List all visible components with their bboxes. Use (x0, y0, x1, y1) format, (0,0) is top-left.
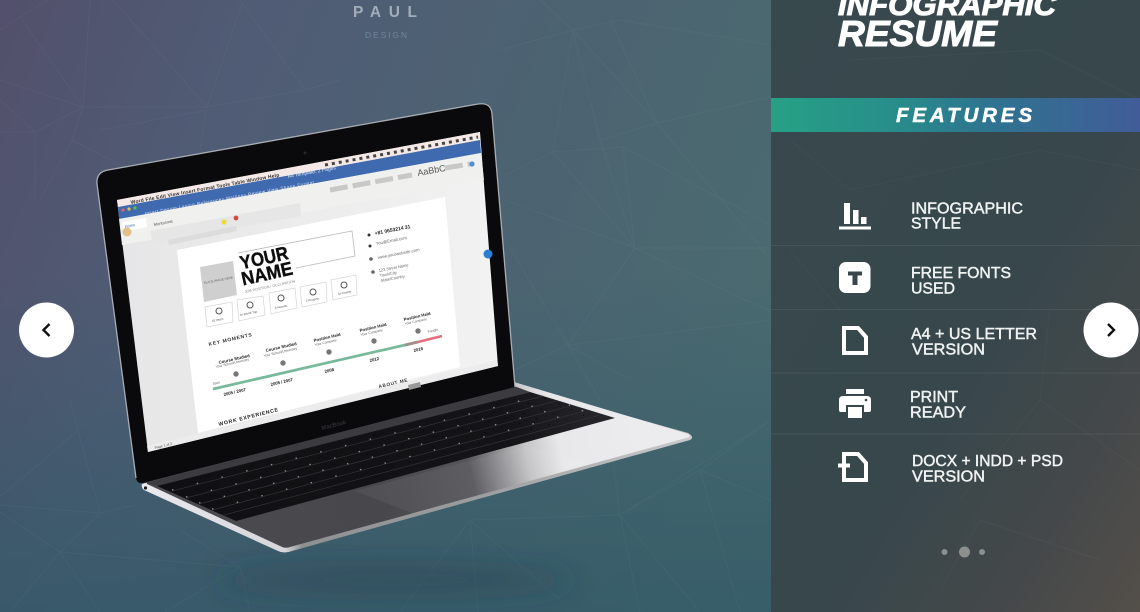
features band: FEATURES (896, 104, 1032, 127)
blue ribbon tabs: Insert Design Layout References Mailings Review View Shape Format (144, 180, 315, 216)
menu bar: Word File Edit View Insert Format Tools Table Window Help (130, 173, 280, 206)
feature: free fonts used: USED (911, 280, 955, 298)
key moments timeline: Course Studied (218, 353, 251, 365)
panel title: RESUME (838, 13, 998, 54)
key moments timeline: Your Company (360, 328, 383, 337)
status bar: Page 1 of 2 (154, 442, 173, 450)
feature: free fonts used: FREE FONTS (911, 265, 1011, 282)
contact details (368, 224, 420, 283)
stat icons and labels: 10 Years (211, 317, 224, 323)
stat icons and labels: 6 Awards (274, 304, 288, 310)
feature: print ready: READY (910, 404, 966, 422)
key moments timeline: 2005 / 2007 (270, 377, 294, 387)
laptop lid: MacBook (321, 420, 348, 432)
contact details: Town/City (379, 270, 397, 278)
stat icons and labels (211, 282, 352, 323)
feature: A4 + US letter version (844, 326, 1037, 358)
toolbar: Montserrat (153, 218, 174, 227)
toolbar: AaBbC (417, 163, 447, 178)
key moments timeline: Freight (427, 328, 439, 334)
right panel (771, 0, 1140, 612)
photo placeholder (200, 261, 237, 302)
feature: docx + indd + psd version (838, 453, 1063, 486)
contact details: You@Email.com (375, 235, 408, 246)
feature: infographic style: STYLE (911, 216, 961, 232)
background mesh lines (0, 0, 771, 612)
key moments timeline: Position Held (403, 311, 431, 322)
key moments timeline: Position Held (359, 322, 387, 333)
icon: printer (839, 389, 871, 418)
feature: docx + indd + psd version: DOCX + INDD + PSD (912, 453, 1063, 470)
photo placeholder: PLACE IMAGE HERE (203, 275, 233, 285)
blue ribbon tabs: A4 Template, 2 Pages (287, 165, 337, 180)
name heading: YOUR (238, 243, 291, 274)
icon: document (844, 328, 866, 353)
key moments timeline: 2008 (324, 367, 335, 374)
contact details: 123 Street Name (378, 262, 410, 273)
key moments timeline: Your Company (314, 338, 337, 347)
panel mesh lines (790, 50, 1140, 590)
window background (117, 132, 498, 452)
stat icons and labels: 3x World Trip (239, 310, 258, 317)
stat icons and labels: 2 Projects (305, 296, 320, 303)
menu bar (117, 132, 480, 207)
key moments timeline: Position Held (313, 332, 341, 343)
right arrow button (1084, 302, 1138, 358)
laptop lid (97, 104, 515, 483)
brand: PAUL DESIGN: DESIGN (365, 30, 407, 40)
key moments timeline: Course Studied (265, 341, 298, 353)
key moments timeline: 2012 (369, 356, 380, 363)
key moments timeline: Your School/University (215, 357, 250, 369)
features band (771, 98, 1140, 132)
feature: print ready (839, 389, 966, 422)
laptop (97, 104, 692, 552)
blue scroll badge (484, 250, 492, 258)
key moments timeline: KEY MOMENTS (208, 332, 253, 348)
about me heading: ABOUT ME (378, 377, 409, 389)
stat boxes (205, 275, 357, 327)
feature: infographic style (839, 200, 1023, 232)
icon: document with plus (838, 454, 866, 480)
key moments timeline (208, 311, 442, 397)
contact details: +81 0653214 31 (374, 224, 411, 237)
toolbar (119, 153, 484, 245)
laptop base (142, 382, 692, 552)
icon: bar chart (839, 203, 871, 230)
feature: print ready: PRINT (910, 389, 958, 406)
screen: Word window (117, 132, 498, 452)
brand: PAUL DESIGN (353, 4, 417, 40)
key moments timeline: 2016 (413, 346, 424, 353)
feature: docx + indd + psd version: VERSION (912, 468, 985, 486)
key moments timeline: Your School/University (263, 346, 298, 358)
toolbar: Home (124, 222, 136, 229)
feature: infographic style: INFOGRAPHIC (911, 200, 1023, 218)
laptop shadow (215, 569, 575, 591)
key moments timeline: Your Company (404, 317, 427, 326)
left arrow button (19, 302, 74, 358)
key moments timeline: Start (212, 380, 220, 386)
key moments timeline: 2005 / 2007 (223, 387, 247, 397)
feature: free fonts used (839, 262, 1011, 298)
status bar (147, 360, 498, 452)
panel row dividers (771, 246, 1140, 434)
panel title (838, 0, 1057, 54)
work experience heading: WORK EXPERIENCE (218, 407, 279, 428)
blue ribbon tabs (118, 140, 481, 219)
contact details: www.yourwebsite.com (377, 247, 420, 260)
name heading (238, 231, 355, 294)
keyboard (157, 392, 615, 521)
feature: A4 + US letter version: VERSION (912, 342, 985, 358)
brand: PAUL DESIGN: PAUL (353, 4, 417, 21)
name heading: JOB POSITION / OCCUPATION (244, 279, 296, 294)
document page (177, 197, 460, 433)
stat icons and labels: 3x Charity (337, 289, 352, 296)
name heading: NAME (240, 259, 295, 290)
icon: font T (839, 262, 870, 293)
pagination dots (942, 546, 985, 558)
contact details: State/Country (380, 273, 405, 283)
feature: A4 + US letter version: A4 + US LETTER (911, 326, 1037, 343)
